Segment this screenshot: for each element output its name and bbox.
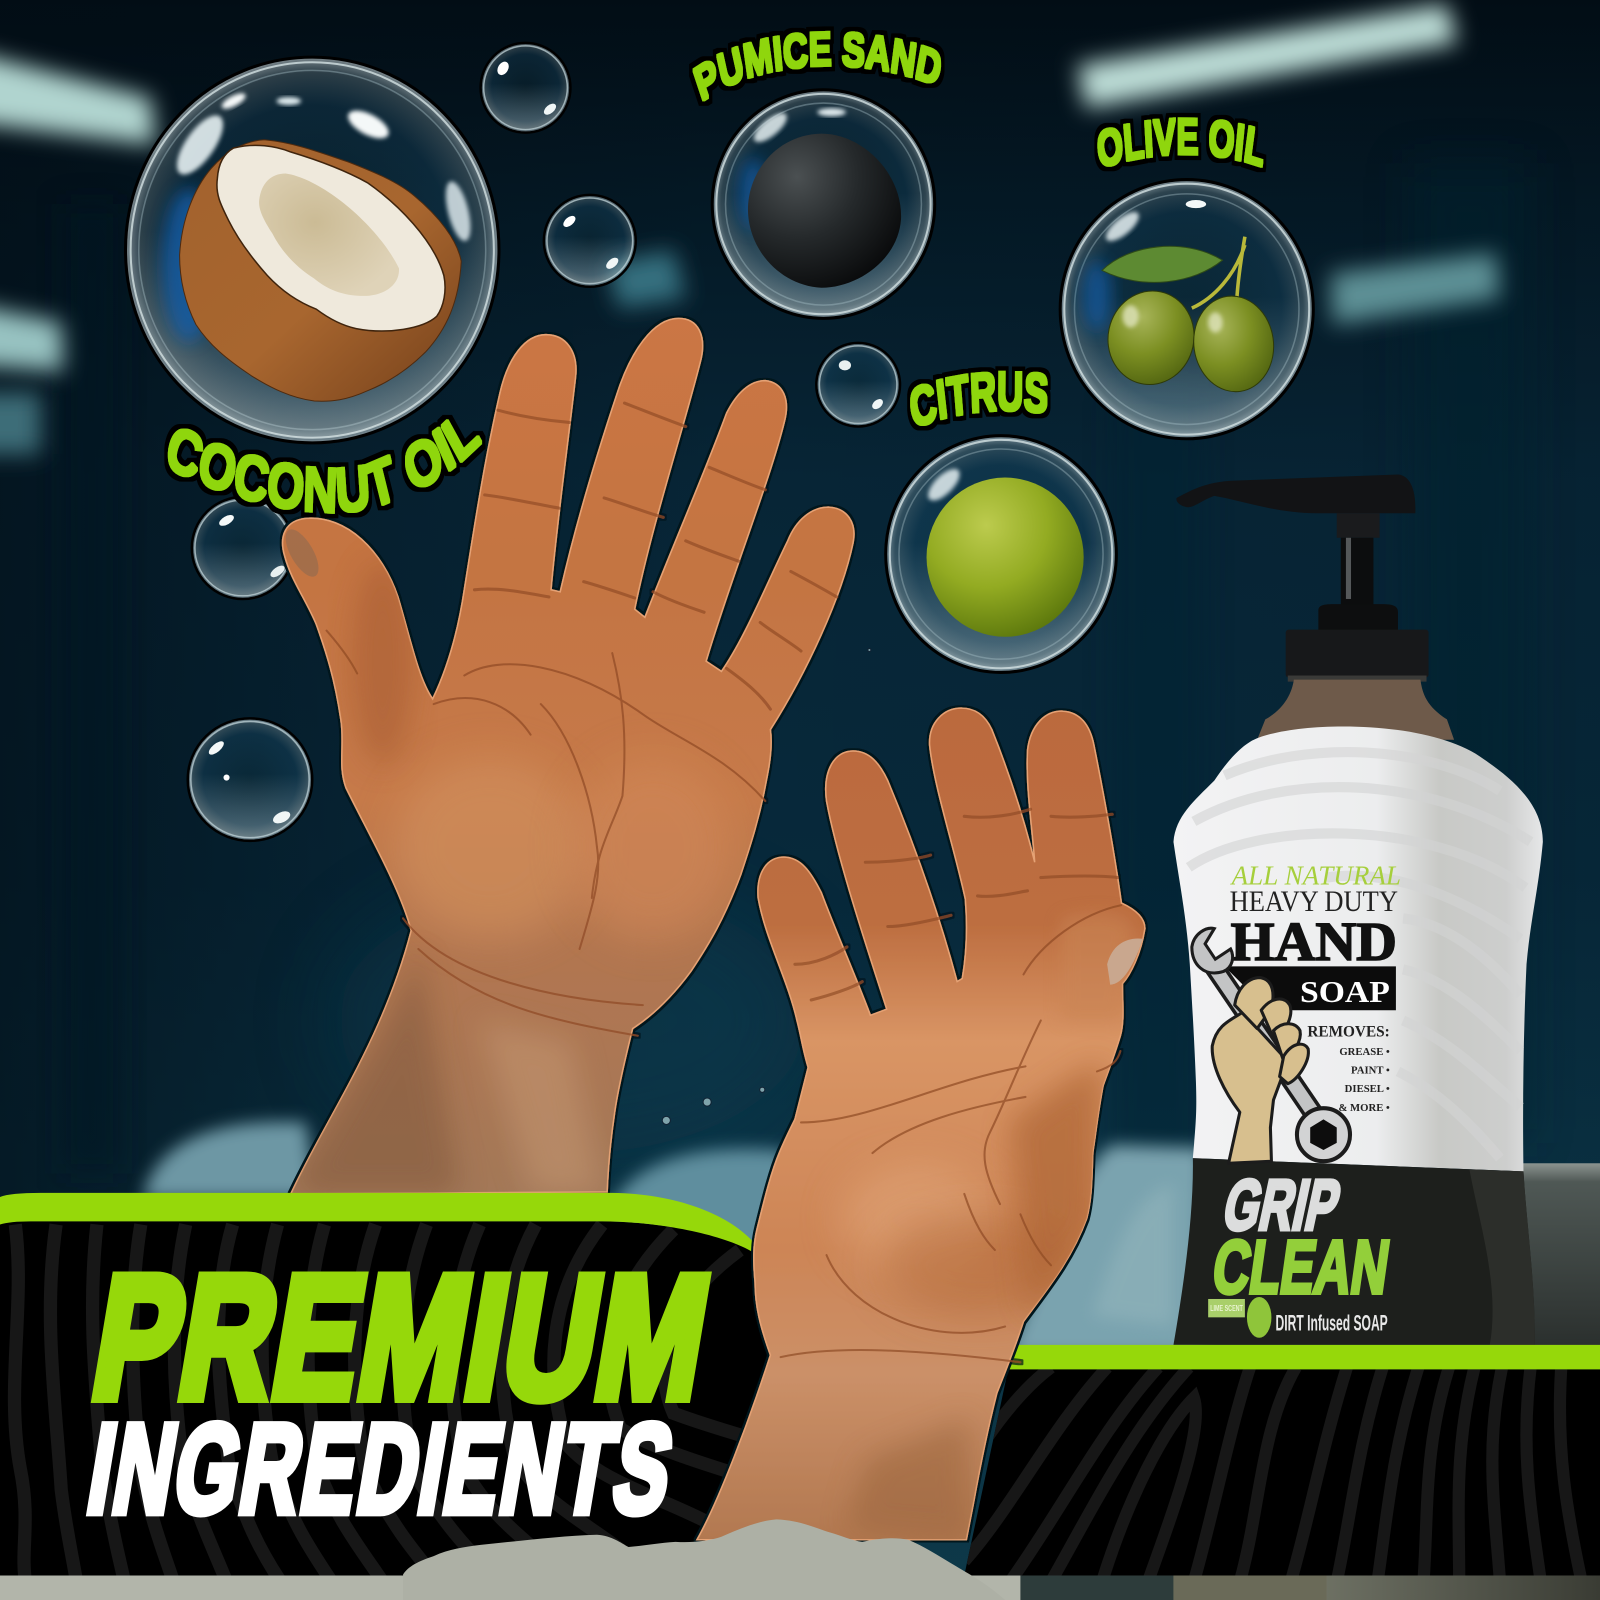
label: Citrus: CITRUS: [907, 366, 1051, 430]
lime scent tag: LIME SCENT: [1210, 1304, 1243, 1313]
title: ingredients: INGREDIENTS: [79, 1398, 685, 1539]
logo text: heavy duty: HEAVY DUTY: [1230, 886, 1398, 918]
black lower wrap: [1173, 1158, 1535, 1345]
small bubble near thumb: [192, 497, 294, 599]
title: premium: PREMIUM: [81, 1241, 723, 1434]
white label: [1173, 726, 1543, 1171]
icon: fist: [1212, 978, 1308, 1163]
dirt infused soap text: DIRT Infused SOAP: [1276, 1311, 1388, 1336]
bubble: olive oil: [1060, 180, 1313, 439]
thumbnail: [1107, 938, 1143, 985]
removes list: & MORE •: [1338, 1102, 1390, 1114]
thumbnail: [279, 524, 325, 582]
floating droplets: [662, 648, 871, 1124]
steel sink edge: [1510, 1163, 1600, 1349]
bubble: coconut oil: [126, 57, 499, 443]
fingerprint pattern on label: [1189, 752, 1531, 1158]
small bubble top: [481, 43, 570, 133]
logo text: clean: CLEAN: [1208, 1225, 1394, 1309]
left raised hand: [279, 318, 854, 1194]
product bottle: [1173, 474, 1543, 1345]
label: Olive Oil: OLIVE OIL: [1094, 112, 1266, 172]
logo text: grip: GRIP: [1217, 1165, 1347, 1245]
icon: olives and leaf: [1099, 237, 1280, 397]
removes list: DIESEL •: [1345, 1083, 1390, 1095]
right hand in front: [697, 708, 1145, 1541]
green border: [0, 1193, 760, 1257]
black bar: [1224, 966, 1396, 1010]
bubble: pumice sand: [712, 90, 935, 318]
left title panel: [0, 1193, 786, 1582]
removes list: [1307, 1024, 1390, 1114]
logo text: soap: SOAP: [1300, 975, 1390, 1009]
pump: [1176, 474, 1429, 682]
small bubble near citrus: [816, 343, 900, 427]
right black panel: [959, 1367, 1600, 1582]
small bubble lower left: [188, 718, 312, 841]
ceiling lights: [0, 4, 1500, 454]
palm and finger creases: [474, 403, 837, 709]
fingerprint stripes: [14, 1224, 786, 1582]
logo text: all natural: ALL NATURAL: [1230, 860, 1401, 891]
bottle neck with brown soap: [1257, 680, 1454, 740]
icon: coconut half: [180, 140, 461, 401]
removes list: REMOVES:: [1307, 1024, 1390, 1041]
foam over wrist at the bottom: [0, 1519, 1600, 1600]
background foam behind the hands: [143, 1122, 1204, 1357]
fingerprint stripes: [959, 1367, 1582, 1582]
small bubble upper middle: [544, 195, 636, 287]
label: Coconut Oil: COCONUT OIL: [164, 414, 486, 518]
logo text: hand: HAND: [1231, 911, 1397, 972]
removes list: PAINT •: [1351, 1064, 1390, 1076]
green bar: [1008, 1345, 1600, 1369]
icon: wrench: [1192, 928, 1350, 1161]
bubble: citrus: [886, 436, 1116, 672]
icon: lime: [927, 478, 1084, 637]
icon: pumice stone: [748, 134, 901, 288]
lime scent tag: [1208, 1297, 1271, 1338]
removes list: GREASE •: [1339, 1046, 1390, 1058]
palm and finger creases: [795, 809, 1117, 1000]
label: Pumice Sand: PUMICE SAND: [689, 26, 944, 106]
